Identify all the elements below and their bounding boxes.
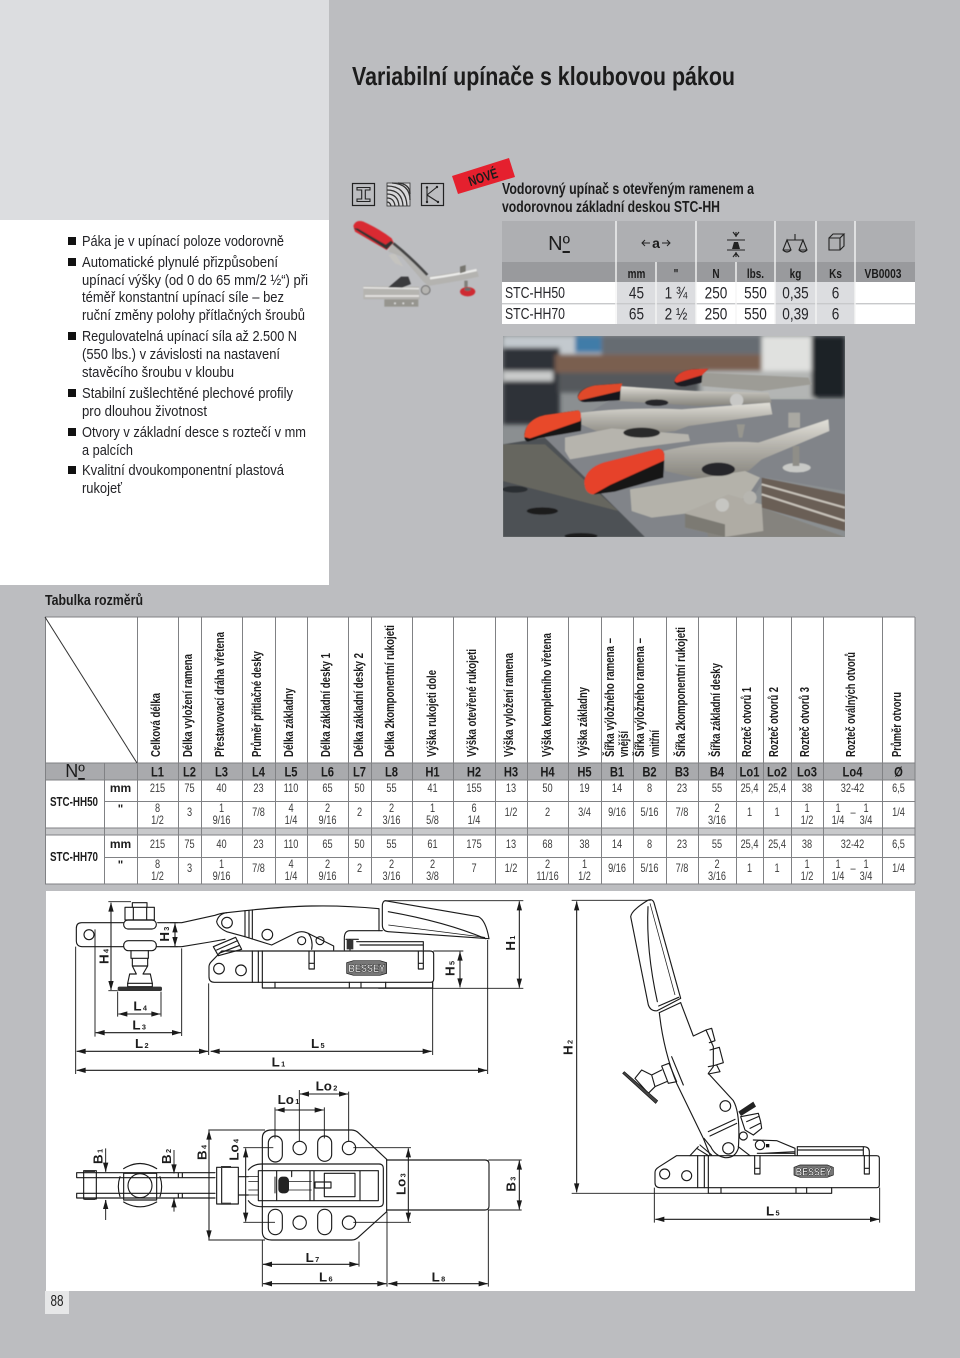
dimension labels: H5	[442, 961, 457, 976]
row: STC-HH50: 19	[579, 783, 590, 795]
symbol band: H2	[467, 764, 481, 780]
row: STC-HH70: 55	[386, 839, 397, 851]
dimension labels	[90, 1079, 519, 1284]
rotated column headings: Délka vyložení ramena	[181, 653, 195, 757]
feature list: rukojeť	[82, 480, 122, 497]
base	[209, 951, 434, 982]
row: STC-HH50: 2	[545, 807, 550, 819]
row: STC-HH70: mm	[110, 837, 131, 851]
icon: jaw opening	[642, 235, 670, 251]
drawing: side view open	[561, 900, 880, 1223]
feature list: a palcích	[82, 442, 133, 459]
dimension labels: B2	[159, 1149, 174, 1164]
row: STC-HH50: 2	[714, 803, 720, 815]
symbol band: Lo1	[740, 764, 759, 780]
unit labels: Ks	[829, 268, 842, 281]
top left light panel	[0, 0, 329, 220]
feature list: Otvory v základní desce s roztečí v mm	[82, 424, 306, 441]
dimension labels: B4	[194, 1144, 209, 1160]
product subtitle	[502, 181, 754, 216]
row: STC-HH50: STC-HH50	[50, 795, 98, 809]
unit labels	[628, 267, 902, 281]
dimension labels: H1	[503, 936, 518, 951]
lever link	[738, 1102, 756, 1116]
row: STC-HH50: 6	[471, 803, 477, 815]
feature list: Kvalitní dvoukomponentní plastová	[82, 462, 285, 479]
row: STC-HH50: 1/2	[801, 815, 814, 827]
row: STC-HH70: 3	[187, 863, 192, 875]
row: STC-HH70: 1/2	[505, 863, 518, 875]
front clamp	[663, 419, 829, 479]
dimension labels: Lo4	[226, 1138, 241, 1161]
dimension labels: H2	[561, 1040, 576, 1055]
row: STC-HH70: 50	[354, 839, 365, 851]
row: STC-HH70: 65	[322, 839, 333, 851]
page number: 88	[50, 1293, 64, 1310]
row: STC-HH70: 25,4	[741, 839, 759, 851]
unit labels: lbs.	[747, 268, 764, 281]
rotated column headings: Výška základny	[576, 687, 590, 757]
row: STC-HH70: 23	[253, 839, 264, 851]
row: STC-HH70: –	[850, 863, 856, 875]
panel: feature list background	[0, 220, 329, 585]
back clamp	[702, 373, 812, 391]
row: STC-HH70: 38	[802, 839, 812, 851]
row: STC-HH70: 7/8	[252, 863, 265, 875]
icon: packing box	[829, 234, 844, 250]
rotated column headings: Celková délka	[149, 692, 163, 757]
row: STC-HH50: 1	[747, 807, 752, 819]
row: STC-HH70: 2	[325, 859, 330, 871]
row: STC-HH50: 1/4	[832, 815, 845, 827]
row: STC-HH70: 7	[471, 863, 477, 875]
row: STC-HH50: 55	[386, 783, 397, 795]
feature list: ruční změny polohy přítlačných šroubů	[82, 307, 305, 324]
row: STC-HH70: 40	[216, 839, 227, 851]
row STC-HH50	[505, 284, 839, 303]
product subtitle: vodorovnou základní deskou STC-HH	[502, 199, 720, 216]
row: STC-HH50: 50	[542, 783, 553, 795]
rotated column headings: Šířka 2komponentní rukojeti	[673, 627, 688, 757]
dimension labels: L3	[132, 1017, 146, 1032]
feature list: Regulovatelná upínací síla až 2.500 N	[82, 328, 297, 345]
row: STC-HH50: 1	[863, 803, 869, 815]
rotated column headings: Délka základny	[282, 688, 296, 757]
row: STC-HH70: 2	[389, 859, 394, 871]
symbol band: Lo2	[767, 764, 787, 780]
arm	[659, 1003, 739, 1158]
dimension labels: H4	[96, 948, 111, 964]
unit labels: kg	[790, 268, 801, 281]
section heading: dimensions table: Tabulka rozměrů	[45, 593, 143, 609]
icon: plastic k	[422, 184, 444, 206]
row: STC-HH70: 38	[579, 839, 590, 851]
row: STC-HH70: 5/16	[641, 863, 659, 875]
symbol band: Ø	[894, 764, 903, 780]
drawing: side view closed	[76, 901, 523, 1074]
row: STC-HH70: 11/16	[536, 871, 559, 883]
row: STC-HH70: 14	[612, 839, 622, 851]
row: STC-HH50: 23	[253, 783, 264, 795]
symbol band: Nº	[65, 761, 85, 781]
row: STC-HH50: 110	[284, 783, 299, 795]
row STC-HH50: 550	[744, 284, 767, 303]
row STC-HH70: 6	[832, 305, 839, 324]
row: STC-HH70: 1	[774, 863, 780, 875]
row: STC-HH50: 40	[216, 783, 227, 795]
row: STC-HH50: 5/16	[641, 807, 659, 819]
row: STC-HH70: 1/2	[578, 871, 591, 883]
row: STC-HH50: 1	[430, 803, 435, 815]
symbol band: B2	[642, 764, 657, 780]
row: STC-HH70: 2	[430, 859, 435, 871]
spindle and foot	[635, 1057, 683, 1093]
row: STC-HH50: 4	[288, 803, 294, 815]
unit labels: N	[712, 268, 720, 281]
row STC-HH70: 250	[705, 305, 727, 324]
product photo: clamp	[353, 221, 479, 307]
rotated column headings: Průměr přítlačné desky	[250, 651, 264, 757]
feature list: Automatické plynulé přizpůsobení	[82, 254, 279, 271]
unit labels: "	[674, 268, 678, 281]
dimension labels: B3	[504, 1177, 519, 1192]
row: STC-HH50: 6,5	[892, 783, 905, 795]
rotated column headings: Délka 2komponentní rukojeti	[383, 625, 397, 757]
row: STC-HH70: 13	[506, 839, 516, 851]
symbol band: Lo4	[843, 764, 862, 780]
title: Variabilní upínače s kloubovou pákou	[352, 61, 735, 91]
symbol band	[65, 761, 903, 781]
row: STC-HH50: 7/8	[676, 807, 689, 819]
rotated column headings: Rozteč otvorů 3	[798, 687, 812, 757]
link	[213, 937, 242, 956]
row: STC-HH70: 1	[582, 859, 587, 871]
row: STC-HH70: 1/4	[892, 863, 905, 875]
row: STC-HH70: STC-HH70	[50, 850, 98, 864]
rotated column headings: vnější	[617, 731, 631, 757]
row: STC-HH70: 1/2	[151, 871, 164, 883]
row: STC-HH70: 61	[427, 839, 438, 851]
row: STC-HH70: 110	[284, 839, 299, 851]
rotated column headings: Rozteč otvorů 1	[740, 687, 754, 757]
row: STC-HH70: 1	[747, 863, 752, 875]
rotated column headings: Výška vyložení ramena	[502, 652, 516, 757]
feature list: stavěcího šroubu v kloubu	[82, 364, 234, 381]
row: STC-HH70: 9/16	[319, 871, 337, 883]
rotated column headings: Rozteč oválných otvorů	[844, 652, 858, 757]
rotated column headings: Výška rukojeti dole	[425, 670, 439, 757]
row STC-HH70: 65	[629, 305, 644, 324]
row: STC-HH70	[50, 837, 905, 883]
panel: technical drawings background	[46, 891, 915, 1291]
row: STC-HH50: 13	[506, 783, 516, 795]
rotated column headings: Délka základní desky 2	[352, 653, 366, 757]
row: STC-HH50: 1/4	[468, 815, 481, 827]
feature list: upínací výšky (od 0 do 65 mm/2 ½“) při	[82, 272, 308, 289]
dimension labels: L6	[319, 1269, 333, 1284]
symbol band: L2	[183, 764, 196, 780]
row: STC-HH70: 3/8	[426, 871, 439, 883]
row: STC-HH50: 3/4	[860, 815, 873, 827]
drawing: top view	[77, 1079, 522, 1287]
row: STC-HH50: 2	[325, 803, 330, 815]
row: STC-HH70: 1	[804, 859, 810, 871]
unit labels: mm	[628, 268, 645, 281]
rotated column headings: Šířka výložného ramena –	[602, 638, 617, 757]
dimension labels: L2	[135, 1036, 149, 1051]
unit labels: VB0003	[864, 267, 902, 281]
row: STC-HH70: 32-42	[841, 839, 864, 851]
row: STC-HH50: 25,4	[768, 783, 786, 795]
row: STC-HH70: 1	[219, 859, 224, 871]
row: STC-HH50: 9/16	[608, 807, 626, 819]
symbol band: L7	[353, 764, 366, 780]
table head bands	[502, 221, 915, 262]
row: STC-HH50: 50	[354, 783, 365, 795]
row: STC-HH70: 215	[150, 839, 165, 851]
symbol band: L4	[252, 764, 265, 780]
page number	[45, 1291, 69, 1314]
row: STC-HH70: 4	[288, 859, 294, 871]
symbol band: H3	[504, 764, 518, 780]
row: STC-HH70: 68	[542, 839, 553, 851]
feature list: téměř konstantní upínací síle – bez	[82, 289, 284, 306]
row STC-HH50: 45	[629, 284, 644, 303]
row STC-HH70: STC-HH70	[505, 306, 565, 323]
rotated column headings: Délka základní desky 1	[319, 653, 333, 757]
row: STC-HH50: 1	[774, 807, 780, 819]
row: STC-HH70: "	[118, 860, 123, 872]
row: STC-HH50: 3	[187, 807, 192, 819]
row: STC-HH50: 3/16	[383, 815, 401, 827]
row: STC-HH50: 1/2	[151, 815, 164, 827]
dimension labels: L7	[306, 1250, 319, 1265]
row: STC-HH70: 9/16	[213, 871, 231, 883]
feature list: Páka je v upínací poloze vodorovně	[82, 233, 284, 250]
symbol band: H4	[540, 764, 555, 780]
symbol band: B3	[675, 764, 689, 780]
dimension labels: L4	[133, 999, 148, 1014]
row: STC-HH70: 75	[184, 839, 195, 851]
symbol band: L6	[321, 764, 334, 780]
symbol band: L1	[151, 764, 164, 780]
application photo: clamps on welding table	[503, 336, 845, 537]
symbol band: L5	[284, 764, 298, 780]
row: STC-HH50: 7/8	[252, 807, 265, 819]
row: STC-HH50: 1	[835, 803, 841, 815]
row: STC-HH70: 1	[863, 859, 869, 871]
rotated column headings: Rozteč otvorů 2	[767, 687, 781, 757]
row STC-HH50: 250	[705, 284, 727, 303]
symbol band: H5	[577, 764, 592, 780]
row STC-HH70: 550	[744, 305, 767, 324]
row: STC-HH70: 1/4	[832, 871, 845, 883]
symbol band: L3	[215, 764, 228, 780]
row: STC-HH50: 1/4	[285, 815, 298, 827]
rotated column headings: Průměr otvoru	[890, 692, 904, 757]
dimension labels: L8	[432, 1269, 445, 1284]
symbol band: H1	[425, 764, 440, 780]
row: STC-HH70: 55	[712, 839, 722, 851]
row: STC-HH70: 1	[835, 859, 841, 871]
rotated column headings: Šířka výložného ramena –	[632, 638, 647, 757]
handle body	[387, 1160, 489, 1210]
nut stack	[706, 1028, 723, 1074]
product data table	[502, 221, 915, 324]
row STC-HH50: 0,35	[782, 284, 809, 303]
row: STC-HH70: 3/4	[860, 871, 873, 883]
row: STC-HH50: 9/16	[213, 815, 231, 827]
row: STC-HH70: 3/16	[383, 871, 401, 883]
dimension labels: L5	[311, 1036, 325, 1051]
row STC-HH70: 0,39	[782, 305, 809, 324]
dimension labels: L5	[766, 1204, 780, 1219]
row: STC-HH70: 1/2	[801, 871, 814, 883]
handle	[631, 900, 681, 1011]
row: STC-HH50: 3/4	[578, 807, 591, 819]
row: STC-HH50: –	[850, 807, 856, 819]
row: STC-HH50: 1/2	[505, 807, 518, 819]
clamp handle	[382, 901, 489, 939]
row: STC-HH50: 38	[802, 783, 812, 795]
dimension labels	[96, 927, 518, 1070]
feature list: Stabilní zušlechtěné plechové profily	[82, 385, 293, 402]
dimensions table	[45, 617, 915, 884]
row: STC-HH50: 1/4	[892, 807, 905, 819]
inner frame	[248, 1164, 383, 1207]
rotated column headings: Přestavovací dráha vřetena	[213, 631, 227, 757]
dimension labels: H3	[157, 927, 172, 942]
rotated column headings: Výška kompletního vřetena	[540, 632, 554, 757]
row: STC-HH50: 23	[677, 783, 687, 795]
row: STC-HH50	[50, 781, 905, 827]
dimension labels: Lo2	[316, 1079, 337, 1094]
row: STC-HH70: 9/16	[608, 863, 626, 875]
icon: wood grain	[387, 183, 410, 206]
icon: jaw opening: a	[652, 235, 660, 251]
dimension lines	[76, 901, 523, 1074]
row: STC-HH50: 2	[357, 807, 362, 819]
symbol band: B4	[710, 764, 724, 780]
base	[655, 1156, 879, 1188]
row: STC-HH50: 2	[389, 803, 394, 815]
row: STC-HH70: 2	[714, 859, 720, 871]
symbol band: Lo3	[797, 764, 817, 780]
dimension lines	[208, 1090, 522, 1287]
row: STC-HH70: 175	[466, 839, 482, 851]
row: STC-HH50: 75	[184, 783, 195, 795]
row: STC-HH50: 8	[155, 803, 160, 815]
row STC-HH70	[505, 305, 839, 324]
row: STC-HH70: 2	[545, 859, 550, 871]
feature list	[68, 233, 308, 497]
new badge	[452, 158, 515, 194]
dimension labels: B1	[90, 1149, 105, 1164]
row STC-HH70: 2 ½	[665, 305, 687, 324]
clamp arm top	[77, 1173, 215, 1198]
row STC-HH50: STC-HH50	[505, 285, 565, 302]
row: STC-HH50: 1	[804, 803, 810, 815]
icon: steel beam	[352, 184, 374, 206]
dimension labels	[561, 1040, 780, 1219]
symbol band: B1	[610, 764, 624, 780]
new badge: NOVÉ	[466, 165, 500, 189]
third clamp	[581, 403, 772, 438]
row: STC-HH70: 23	[677, 839, 687, 851]
row: STC-HH50: 25,4	[741, 783, 759, 795]
row: STC-HH70: 8	[647, 839, 652, 851]
row: STC-HH50: 1	[219, 803, 224, 815]
rotated column headings: Šířka základní desky	[708, 663, 723, 757]
row: STC-HH50: 41	[427, 783, 438, 795]
row: STC-HH50: 65	[322, 783, 333, 795]
head text: number sign: Nº	[548, 233, 571, 255]
logo: BESSEY	[796, 1167, 832, 1179]
row: STC-HH70: 1/4	[285, 871, 298, 883]
dimension labels: Lo3	[394, 1173, 409, 1195]
row: STC-HH70: 7/8	[676, 863, 689, 875]
icon: scales weight	[783, 234, 807, 252]
row: STC-HH50: 3/16	[708, 815, 726, 827]
row: STC-HH70: 2	[357, 863, 362, 875]
dimension labels: Lo1	[278, 1092, 299, 1107]
product subtitle: Vodorovný upínač s otevřeným ramenem a	[502, 181, 754, 198]
row: STC-HH70: 25,4	[768, 839, 786, 851]
dimension lines	[572, 900, 880, 1223]
row STC-HH50: 1 ¾	[665, 284, 687, 303]
row STC-HH50: 6	[832, 284, 839, 303]
rotated column headings: vnitřní	[648, 730, 662, 757]
row: STC-HH50: 215	[150, 783, 165, 795]
dimension labels: L1	[272, 1055, 285, 1070]
feature list: (550 lbs.) v závislosti na nastavení	[82, 346, 281, 363]
row: STC-HH70: 3/16	[708, 871, 726, 883]
row: STC-HH50: "	[118, 804, 123, 816]
feature list: pro dlouhou životnost	[82, 403, 208, 420]
symbol band: L8	[385, 764, 398, 780]
row: STC-HH70: 8	[155, 859, 160, 871]
row: STC-HH50: 32-42	[841, 783, 864, 795]
icon: clamping force	[727, 232, 745, 257]
row: STC-HH50: 14	[612, 783, 622, 795]
row: STC-HH50: mm	[110, 781, 131, 795]
second clamp	[618, 386, 772, 406]
row: STC-HH50: 9/16	[319, 815, 337, 827]
rotated column headings	[149, 625, 904, 757]
logo: BESSEY	[348, 963, 385, 975]
row: STC-HH50: 155	[466, 783, 482, 795]
row: STC-HH50: 55	[712, 783, 722, 795]
rotated column headings: Výška otevřené rukojeti	[465, 649, 479, 757]
spindle	[125, 903, 154, 920]
row: STC-HH50: 8	[647, 783, 652, 795]
row: STC-HH70: 6,5	[892, 839, 905, 851]
row: STC-HH50: 5/8	[426, 815, 439, 827]
